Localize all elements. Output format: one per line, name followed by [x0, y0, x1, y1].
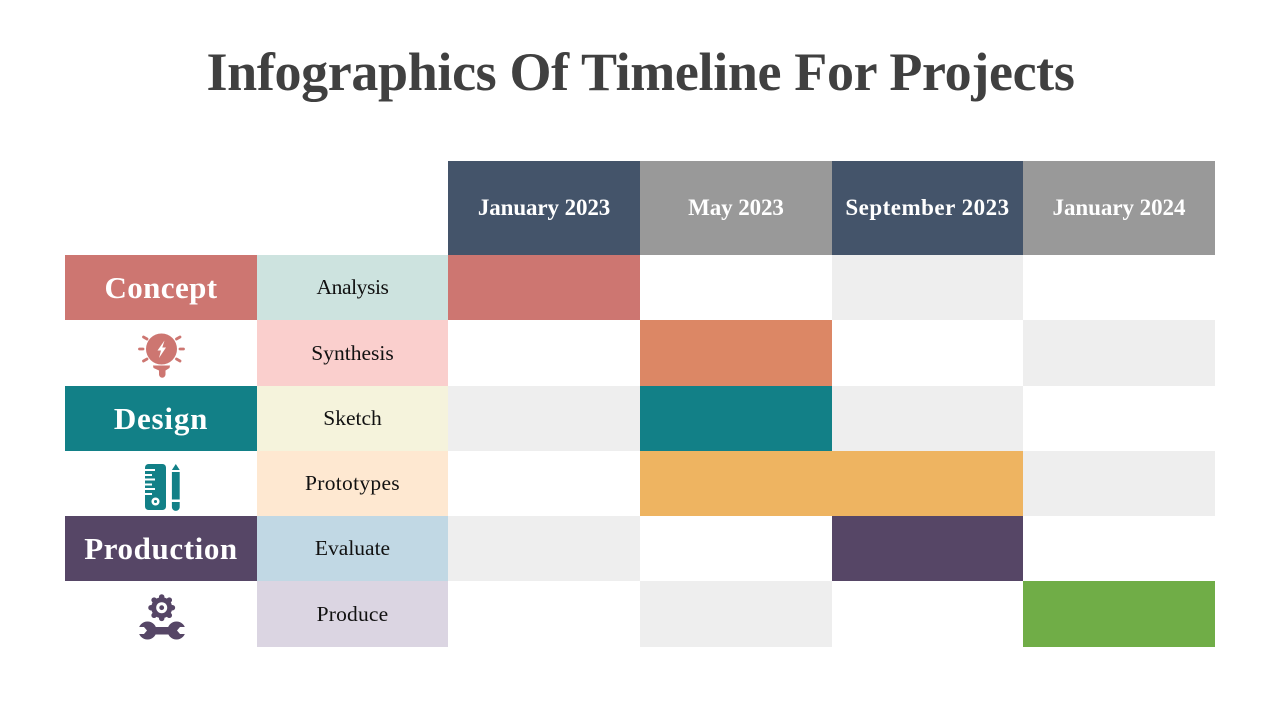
- task: Prototypes: [257, 451, 448, 516]
- title: Infographics Of Timeline For Projects: [206, 42, 1074, 102]
- task: Synthesis: Synthesis: [311, 340, 394, 364]
- empty grey cells: [448, 255, 1215, 647]
- timeline bar: Prototypes, May to September 2023: [640, 451, 1023, 516]
- task: Analysis: Analysis: [316, 275, 389, 299]
- task: Sketch: [257, 386, 448, 451]
- timeline bar: Produce, January 2024: [1023, 581, 1215, 647]
- header: May 2023: [640, 161, 832, 255]
- task: Evaluate: Evaluate: [315, 536, 390, 560]
- section label: Production: Production: [84, 530, 238, 566]
- header: January 2024: January 2024: [1053, 195, 1185, 220]
- task: Sketch: Sketch: [323, 406, 382, 430]
- section label: Design: [65, 386, 257, 451]
- task: Produce: Produce: [317, 602, 388, 626]
- section label: Concept: Concept: [104, 270, 218, 304]
- icon: gear and wrench: [139, 594, 185, 640]
- header: January 2023: January 2023: [478, 195, 610, 220]
- task: Evaluate: [257, 516, 448, 581]
- task: Synthesis: [257, 320, 448, 386]
- section label: Design: Design: [114, 400, 208, 436]
- timeline bar: Sketch, May 2023: [640, 386, 832, 451]
- timeline bar: Synthesis, May 2023: [640, 320, 832, 386]
- header: September 2023: September 2023: [845, 195, 1010, 220]
- section label: Production: [65, 516, 257, 581]
- task: Prototypes: Prototypes: [305, 471, 400, 495]
- icon: light bulb: [138, 334, 185, 378]
- header: January 2023: [448, 161, 640, 255]
- icon: ruler and pencil: [145, 464, 180, 511]
- timeline bar: Analysis, January 2023: [448, 255, 640, 320]
- timeline bar: Evaluate, September 2023: [832, 516, 1023, 581]
- task: Analysis: [257, 255, 448, 320]
- section label: Concept: [65, 255, 257, 320]
- task: Produce: [257, 581, 448, 647]
- header: May 2023: May 2023: [688, 195, 784, 220]
- header: January 2024: [1023, 161, 1215, 255]
- header: September 2023: [832, 161, 1023, 255]
